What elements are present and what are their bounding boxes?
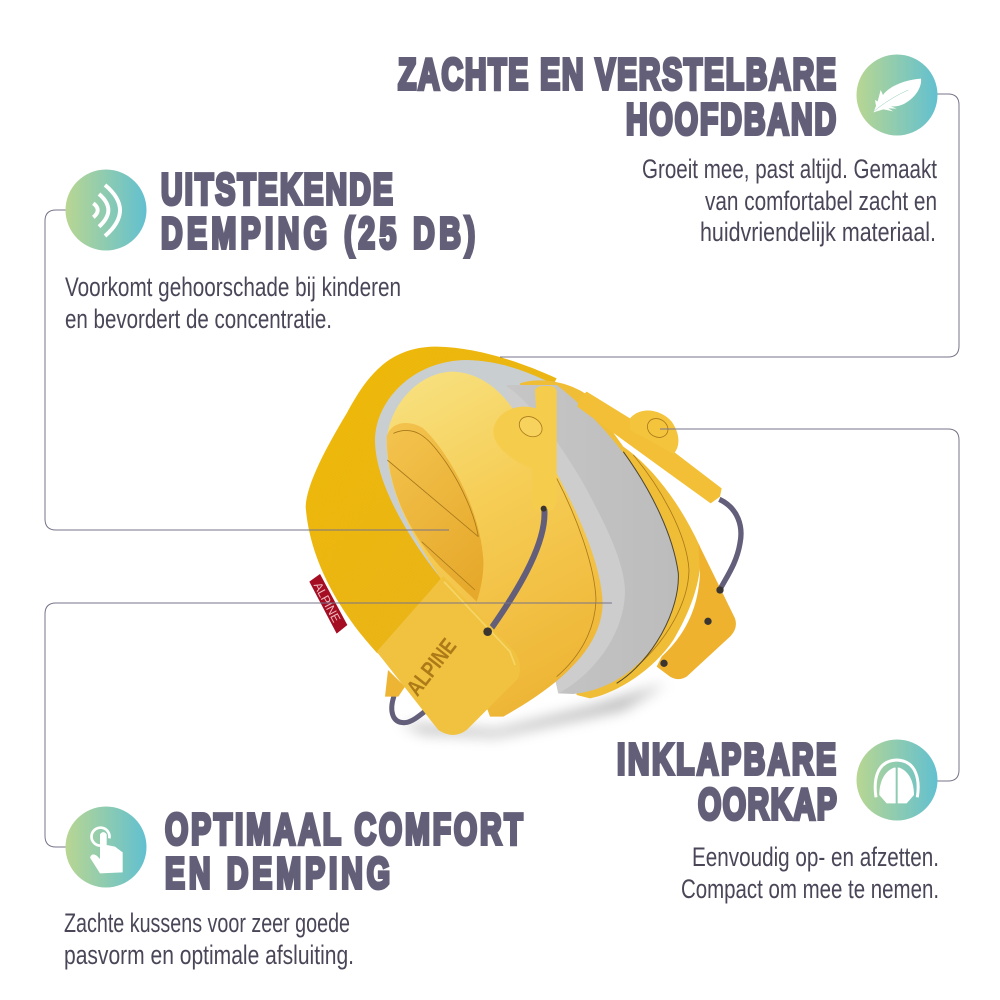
connector: foldable cup [660,429,959,781]
inner gray band [375,360,553,607]
cushion dark edge [617,452,678,683]
heading: EN DEMPING [165,848,390,897]
body text [65,272,401,334]
connector: attenuation [45,210,449,530]
heading [398,49,836,143]
wire sockets [541,506,724,594]
body text [681,842,939,904]
middle gray ear cushion [507,387,625,693]
front arm and pivot [493,386,557,513]
red brand tag [309,574,347,634]
panel: attenuation [65,164,475,334]
red brand tag: ALPINE [311,580,343,625]
rear lug [385,670,405,697]
icon: sound waves [66,170,146,250]
body text: pasvorm en optimale afsluiting. [64,940,354,970]
yellow fabric headband [306,347,557,653]
heading: ZACHTE EN VERSTELBARE [398,49,836,98]
outer gray ear cushion [507,385,678,694]
heading [617,734,837,828]
headphones product illustration [306,347,741,737]
panel: foldable cup [617,734,939,904]
body text: Voorkomt gehoorschade bij kinderen [65,272,401,302]
heading: UITSTEKENDE [161,164,393,213]
rear arm and pivot [577,392,722,503]
body text: huidvriendelijk materiaal. [700,217,936,247]
cup seam [557,478,596,677]
panel: comfort [64,804,523,970]
ground shadow [400,683,667,737]
heading: DEMPING (25 DB) [161,208,475,257]
rear yellow cup [520,380,736,698]
heading: INKLAPBARE [617,734,836,783]
heading: OORKAP [698,779,837,828]
heading [165,804,523,897]
icon: touch hand [66,806,146,888]
body text [64,908,354,970]
rear wire right [719,499,741,591]
icon: feather [856,54,938,136]
heading: HOOFDBAND [626,94,836,143]
heading: OPTIMAAL COMFORT [165,804,523,853]
body text: van comfortabel zacht en [705,186,937,216]
panel: headband [398,49,938,247]
front block with logo [377,576,520,735]
body text [642,154,937,247]
body text: en bevordert de concentratie. [65,304,332,334]
front grey wire [489,509,544,632]
front block with logo: ALPINE [401,633,461,700]
front yellow ear cup [387,372,603,717]
connector: comfort [45,603,612,847]
recessed inner panel [387,423,483,602]
panel seams [387,430,478,590]
heading [161,164,475,257]
body text: Zachte kussens voor zeer goede [64,908,350,938]
connector: headband [500,94,959,357]
rear wire left [392,696,427,723]
icon: earmuffs [856,740,938,820]
